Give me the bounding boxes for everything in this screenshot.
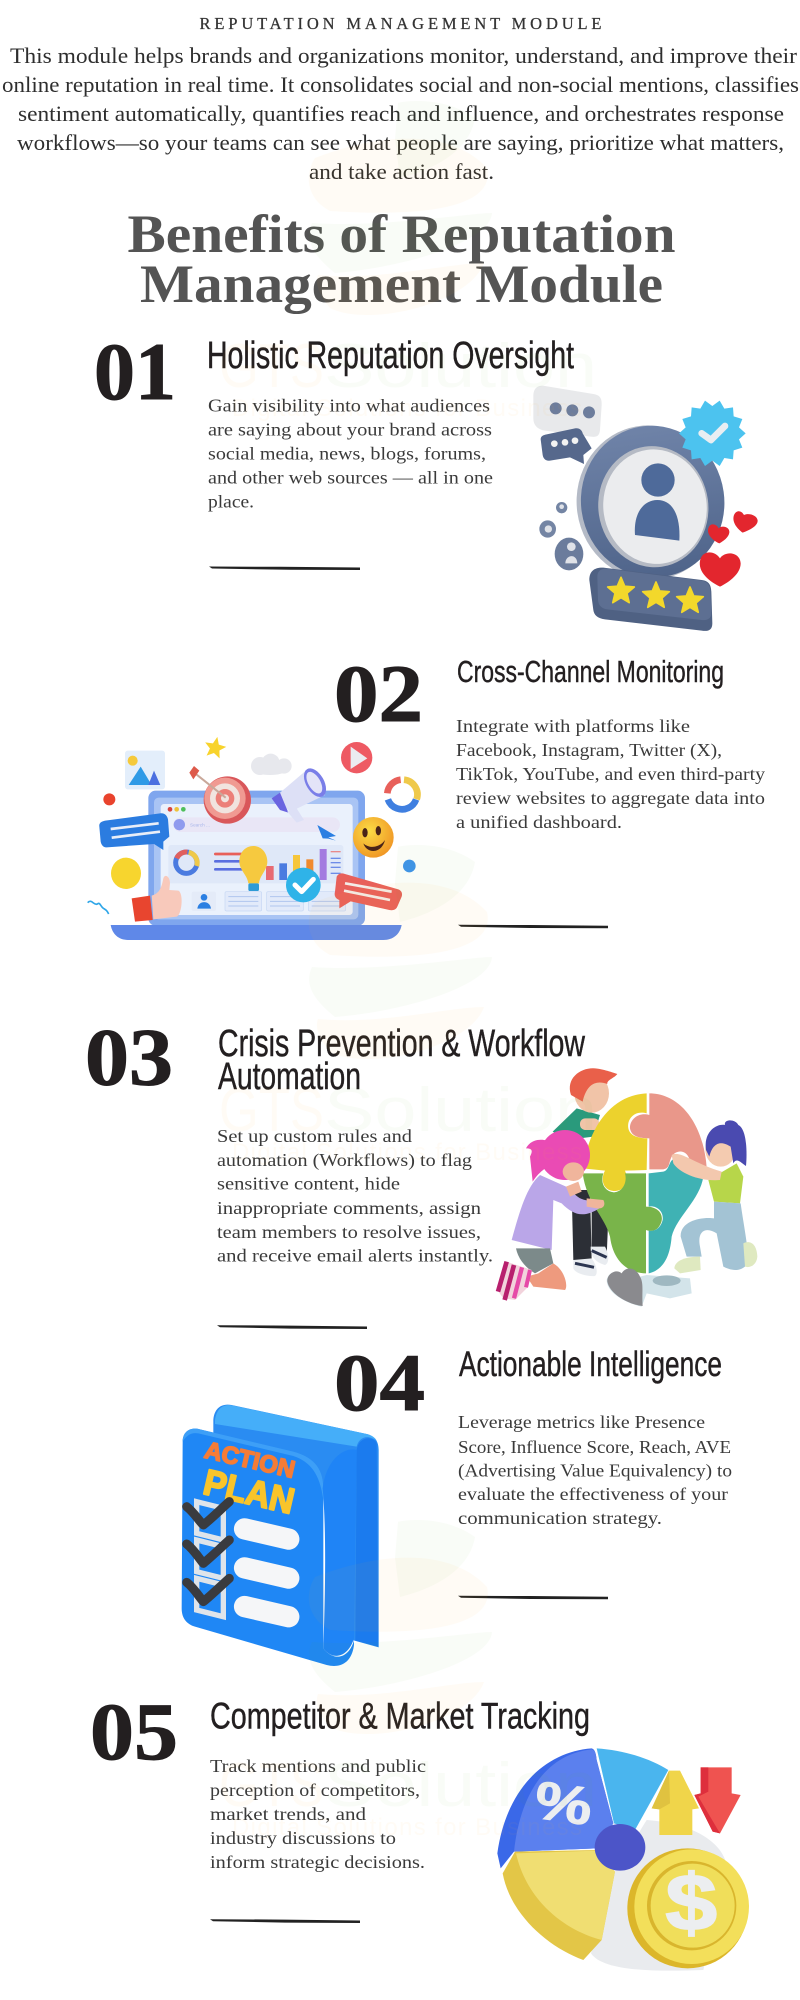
text 03: inappropriate comments, assign [217,1198,481,1218]
text 04: evaluate the effectiveness of your [458,1484,728,1504]
text 04: communication strategy. [458,1508,662,1528]
icon: market pie chart and coin: % [531,1771,596,1837]
text 04: Leverage metrics like Presence [458,1412,705,1432]
icon: market pie chart and coin: $ [665,1858,717,1947]
number 04: 04 [334,1337,425,1428]
icon: marketing laptop dashboard: Search ... [190,822,210,827]
text 05: market trends, and [210,1804,366,1824]
heading 03: Crisis Prevention & Workflow [218,1023,585,1065]
text 03: automation (Workflows) to flag [217,1150,472,1171]
text 01 [208,396,493,512]
text 05: inform strategic decisions. [210,1852,425,1872]
intro paragraph [2,43,799,184]
watermark: bottom [219,1520,597,1841]
text 03 [217,1126,493,1266]
text 02: a unified dashboard. [456,812,622,832]
icon: action plan checklist: PLAN [200,1461,298,1522]
number 02: 02 [334,648,423,739]
divider 05 [210,1919,360,1923]
text 04: (Advertising Value Equivalency) to [458,1460,732,1482]
watermark: top: Digital Solutions for Business [232,395,582,422]
text 05: perception of competitors, [210,1780,420,1800]
text 01: social media, news, blogs, forums, [208,444,486,464]
heading 05: Competitor & Market Tracking [210,1696,590,1736]
main heading: Benefits of Reputation [128,204,676,264]
number 03: 03 [85,1012,173,1102]
icon: action plan checklist [182,1405,379,1666]
icon: marketing laptop dashboard [88,735,421,940]
icon: reputation profile [533,386,758,631]
watermark: top: GTS [219,332,324,401]
panel: benefit 03 [85,1012,757,1329]
intro paragraph: workflows—so your teams can see what people are saying, prioritize what matters, [17,130,784,155]
heading 04: Actionable Intelligence [459,1345,722,1384]
intro paragraph: sentiment automatically, quantifies reach and influence, and orchestrates response [18,101,784,126]
panel: benefit 01 [94,326,758,631]
heading 01: Holistic Reputation Oversight [207,335,574,377]
intro paragraph: This module helps brands and organizations monitor, understand, and improve their [10,43,798,68]
panel: benefit 02 [88,648,765,940]
icon: team assembling puzzle bulb [497,1068,757,1307]
text 02: Facebook, Instagram, Twitter (X), [456,740,722,761]
number 05: 05 [90,1686,178,1777]
divider 03 [217,1325,367,1329]
icon: market pie chart and coin [497,1748,749,1971]
panel: benefit 04 [182,1337,732,1666]
number 01: 01 [94,326,176,417]
text 01: and other web sources — all in one [208,468,493,488]
watermark: top [219,101,597,422]
text 02: TikTok, YouTube, and even third-party [456,764,765,784]
watermark: middle [219,845,597,1166]
watermark: middle: Digital Solutions for Business [232,1139,582,1166]
watermark: middle: Solution [324,1076,597,1145]
text 01: are saying about your brand across [208,420,492,440]
intro paragraph: and take action fast. [309,159,494,184]
watermark: middle: GTS [219,1076,324,1145]
watermark: bottom: GTS [219,1751,324,1820]
text 05: industry discussions to [210,1828,396,1848]
divider 02 [458,925,608,928]
heading 03: Automation [218,1056,361,1098]
main heading: Management Module [140,254,663,314]
text 04 [458,1412,732,1528]
text 03: and receive email alerts instantly. [217,1246,493,1266]
divider 04 [458,1596,608,1599]
text 05 [210,1756,426,1872]
divider 01 [209,566,360,570]
main heading [128,204,676,314]
text 03: team members to resolve issues, [217,1222,481,1242]
watermark: top: Solution [324,332,597,401]
intro paragraph: online reputation in real time. It consolidates social and non-social mentions, classifies [2,72,799,97]
watermark: bottom: Solution [324,1751,597,1820]
text 01: place. [208,492,254,512]
icon: action plan checklist: ACTION [202,1437,297,1484]
text 02: review websites to aggregate data into [456,788,765,808]
text 04: Score, Influence Score, Reach, AVE [458,1437,731,1457]
text 03: sensitive content, hide [217,1174,400,1194]
text 02: Integrate with platforms like [456,716,690,736]
heading 03 [218,1023,585,1098]
watermark: bottom: Digital Solutions for Business [232,1814,582,1841]
text 05: Track mentions and public [210,1756,426,1776]
text 03: Set up custom rules and [217,1126,412,1146]
header label: REPUTATION MANAGEMENT MODULE [200,14,602,33]
panel: benefit 05 [90,1686,749,1971]
text 01: Gain visibility into what audiences [208,396,490,416]
text 02 [456,716,765,832]
